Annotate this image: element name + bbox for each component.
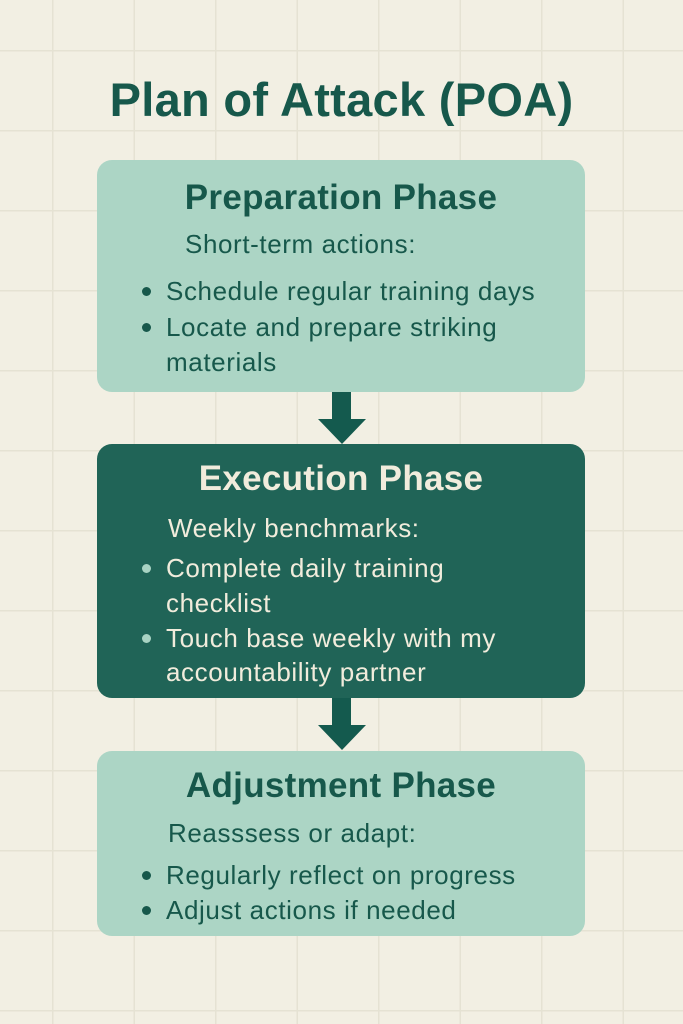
bullet list: Locate and prepare striking <box>166 312 497 342</box>
bullet list: materials <box>166 347 277 377</box>
bullet list: Adjust actions if needed <box>166 895 456 925</box>
bullet list: Touch base weekly with my <box>166 623 496 653</box>
heading: execution: Execution Phase <box>199 459 483 498</box>
subheading: Weekly benchmarks: <box>168 513 420 543</box>
subheading: Reasssess or adapt: <box>168 818 416 848</box>
bullet list <box>142 860 516 925</box>
title: Plan of Attack (POA) <box>110 73 573 126</box>
panel: execution <box>97 444 585 698</box>
heading: preparation: Preparation Phase <box>185 178 497 217</box>
arrow 1 <box>318 392 366 444</box>
bullet list: checklist <box>166 588 271 618</box>
panel: adjustment <box>97 751 585 936</box>
bullet list: Complete daily training <box>166 553 444 583</box>
bullet list: accountability partner <box>166 657 426 687</box>
bullet list: Regularly reflect on progress <box>166 860 516 890</box>
arrow 2 <box>318 698 366 750</box>
bullet list <box>142 276 535 377</box>
panel: preparation <box>97 160 585 392</box>
heading: adjustment: Adjustment Phase <box>186 766 496 805</box>
bullet list: Schedule regular training days <box>166 276 535 306</box>
bullet list <box>142 553 496 687</box>
subheading: Short-term actions: <box>185 229 416 259</box>
